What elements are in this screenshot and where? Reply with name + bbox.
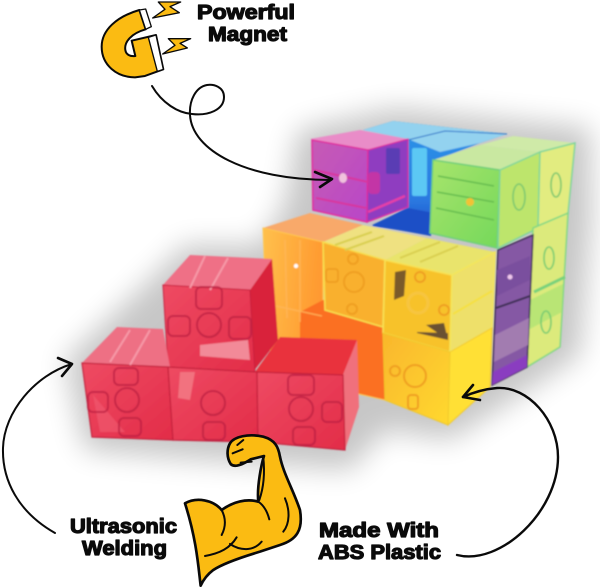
assembled cube: green and lime piece (430, 136, 575, 248)
label: Ultrasonic Welding: Ultrasonic (70, 516, 177, 538)
heading: Powerful Magnet: Magnet (208, 24, 287, 46)
arrow: welding label to red cube (3, 358, 72, 533)
drop shadow behind the cubes (65, 108, 592, 470)
magnet white tips (139, 9, 163, 71)
magnet body (102, 10, 163, 77)
detail: red cube magnet housings (88, 287, 342, 445)
assembled cube: orange piece (263, 213, 385, 400)
cube photo group (82, 121, 575, 450)
icon: horseshoe magnet with lightning bolts (102, 2, 191, 77)
label: Ultrasonic Welding (70, 516, 177, 560)
label: Ultrasonic Welding: Welding (82, 538, 167, 560)
lightning bolt, upper (153, 2, 181, 18)
heading: Powerful Magnet: Powerful (197, 2, 295, 24)
label: Made With ABS Plastic: ABS Plastic (318, 542, 441, 564)
label: Made With ABS Plastic (318, 520, 441, 564)
lightning bolt, lower (163, 39, 191, 54)
assembled cube: lime right column (527, 213, 568, 367)
icon: flexed muscle arm (185, 435, 301, 586)
label: Made With ABS Plastic: Made With (319, 520, 439, 542)
assembled cube: purple piece (492, 235, 533, 385)
assembled cube: magenta piece (310, 130, 408, 222)
muscle definition lines (205, 440, 289, 556)
detail: magnet housings seen through the plastic (326, 254, 449, 409)
arrow: magnet label to magenta cube (152, 85, 332, 187)
red cube piece (82, 255, 359, 450)
arrow: ABS plastic label to yellow cube (457, 385, 558, 556)
heading: Powerful Magnet (197, 2, 295, 46)
assembled cube: upper blue piece (363, 121, 507, 236)
assembled cube: yellow pieces (323, 225, 495, 425)
